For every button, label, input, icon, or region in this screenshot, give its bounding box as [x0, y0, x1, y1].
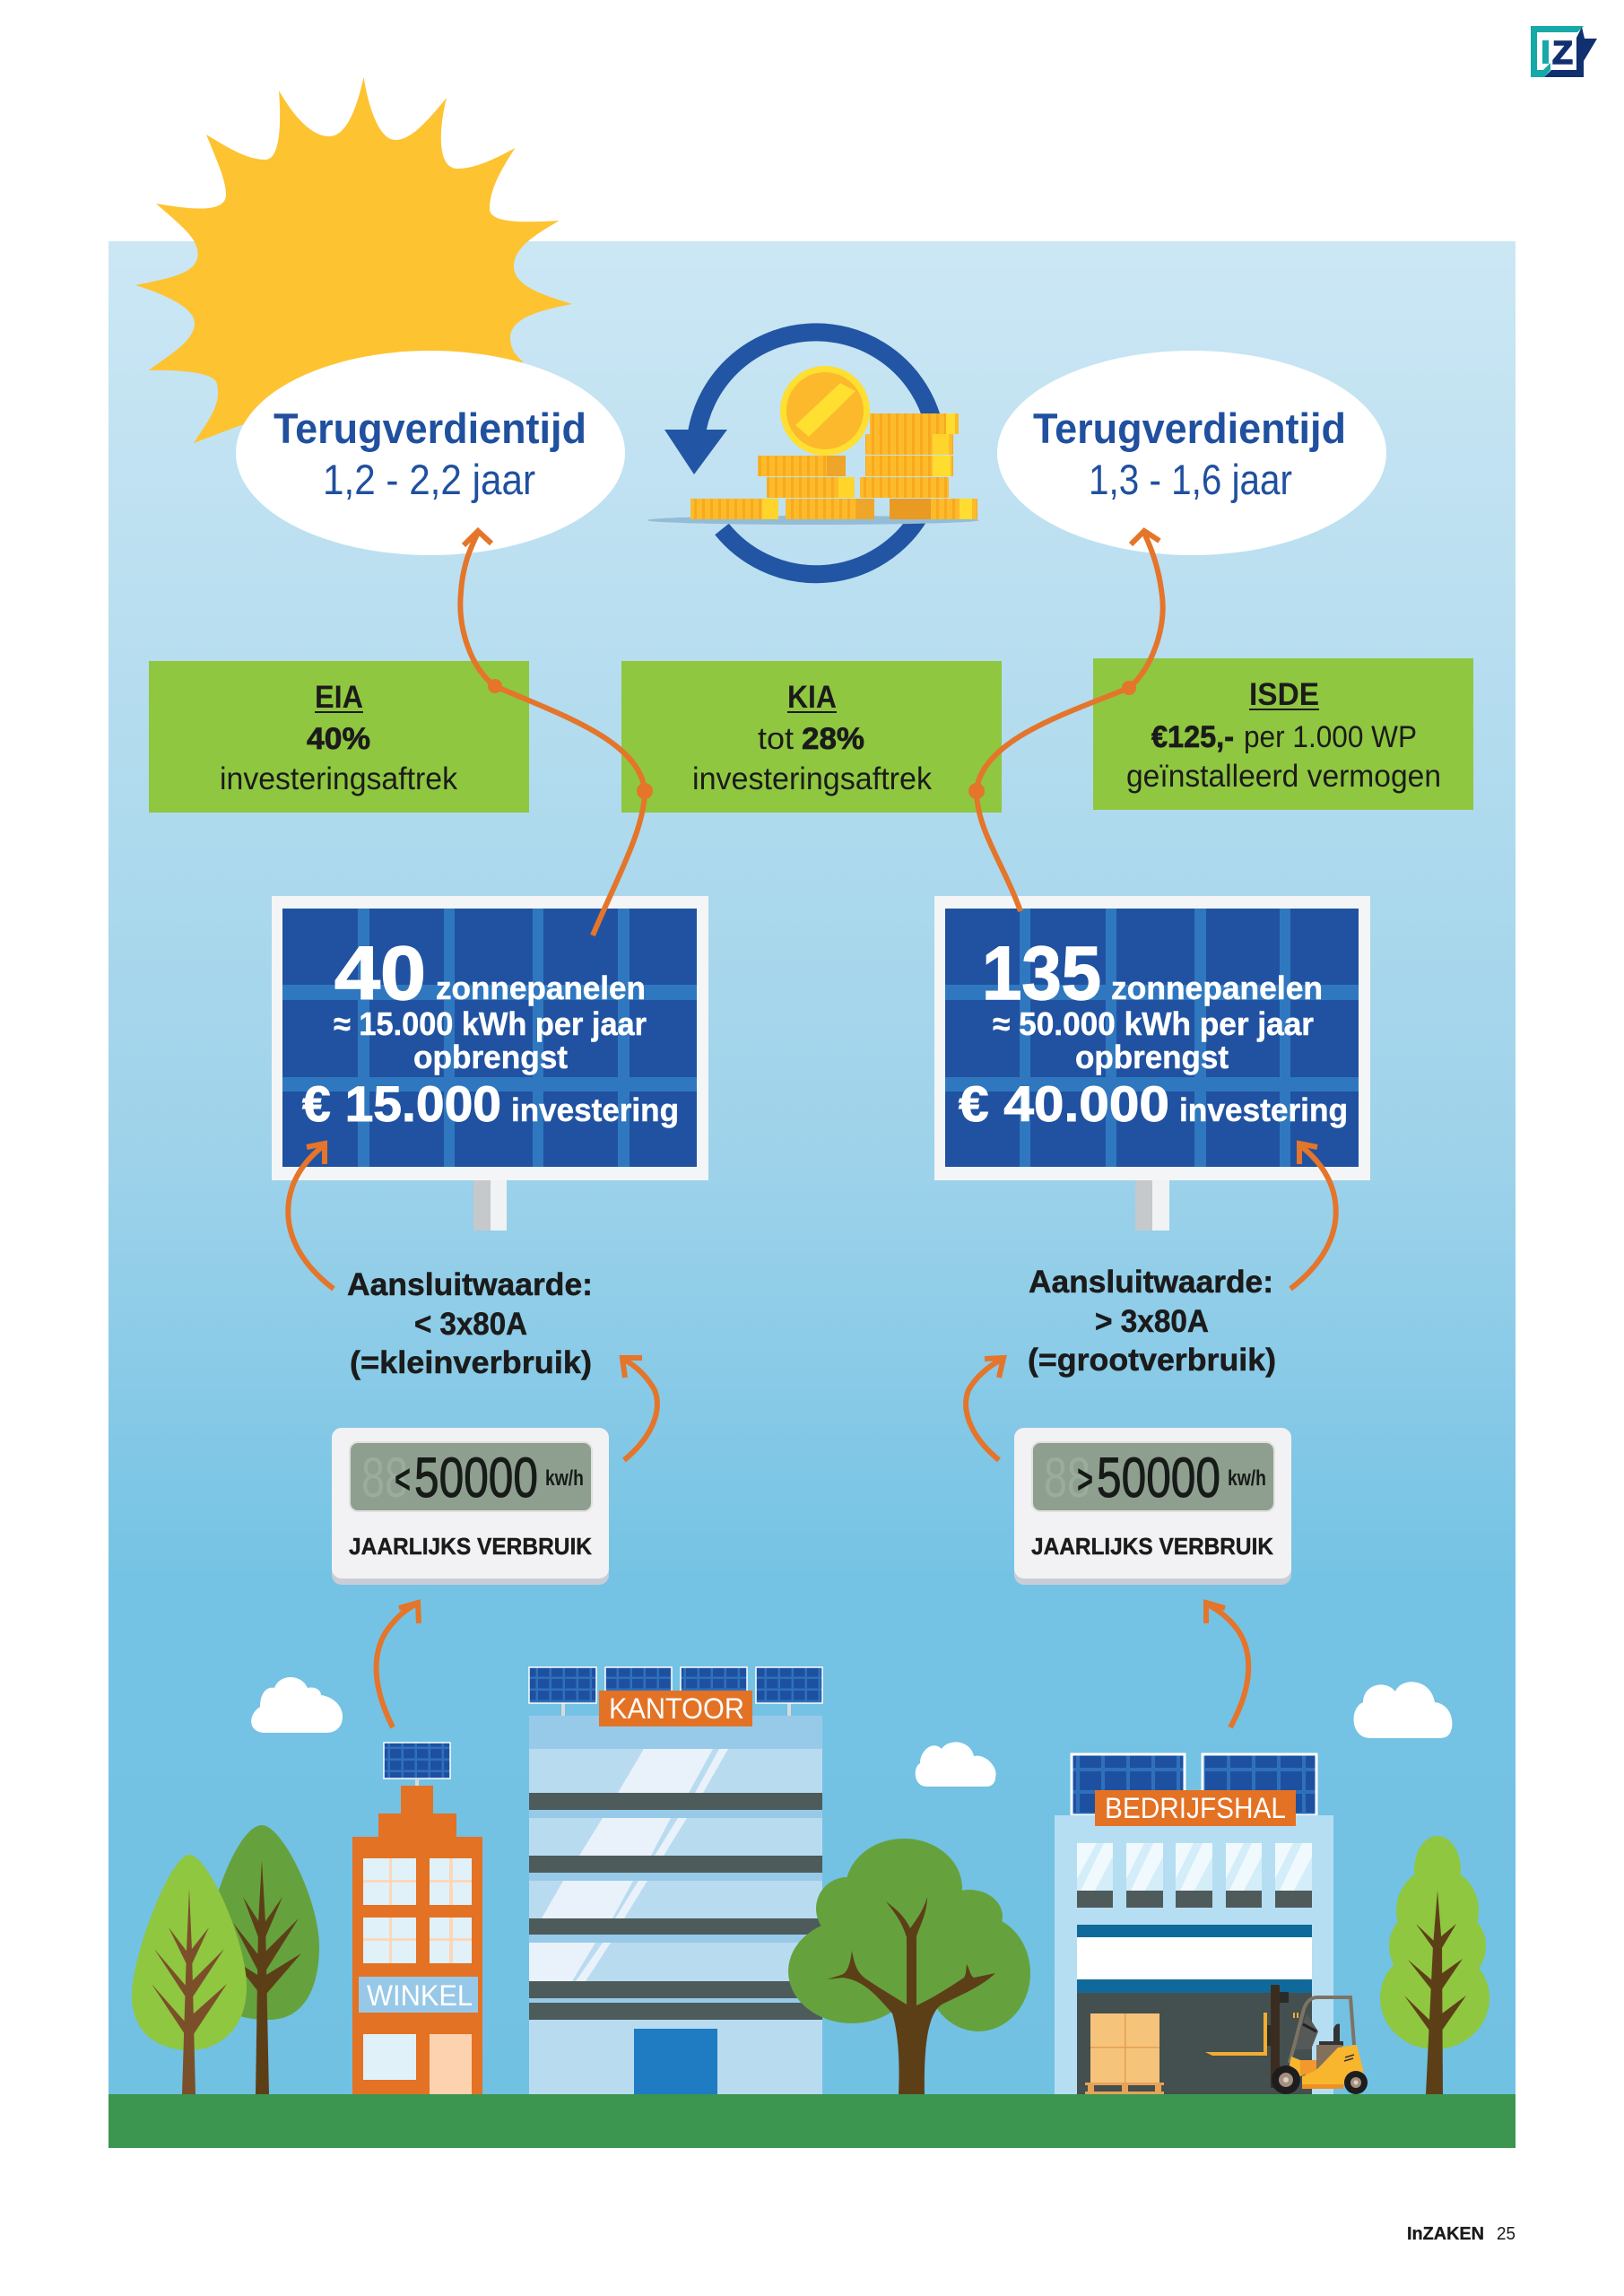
text: aansluitwaarde links: < 3x80A	[414, 1307, 527, 1342]
text: aansluitwaarde rechts: Aansluitwaarde:	[1029, 1265, 1273, 1300]
building: winkel: WINKEL	[367, 1979, 473, 2012]
solar panel rechts: investering	[1179, 1091, 1348, 1128]
meter links: <	[395, 1456, 411, 1502]
arrow: bedrijfshal naar meter	[1206, 1603, 1248, 1727]
solar panel rechts: zonnepanelen	[1111, 970, 1323, 1006]
icon: cloud links	[251, 1677, 343, 1733]
building: kantoor	[529, 1667, 822, 2094]
panel: EIA: 40%	[307, 722, 370, 756]
panel: EIA: investeringsaftrek	[220, 761, 457, 796]
pallet with boxes	[1085, 2013, 1164, 2094]
meter rechts: kw/h	[1228, 1466, 1266, 1491]
panel: ISDE: geïnstalleerd vermogen	[1126, 759, 1441, 794]
solar panel rechts: € 40.000	[959, 1075, 1169, 1132]
text: aansluitwaarde rechts: > 3x80A	[1095, 1304, 1209, 1339]
arrow: aansluitwaarde rechts naar paneel	[1290, 1144, 1336, 1289]
tree: rond	[788, 1839, 1030, 2094]
building: winkel	[352, 1743, 482, 2094]
panel: KIA: 28%	[802, 722, 864, 756]
meter links: 88	[361, 1447, 408, 1509]
icon: coins with cycle arrow	[647, 332, 979, 574]
arrow: rechts zonnepaneel naar terugverdientijd	[968, 531, 1163, 911]
text: aansluitwaarde links: Aansluitwaarde:	[347, 1267, 593, 1302]
solar panel rechts: 135	[982, 931, 1101, 1015]
meter rechts: >	[1077, 1456, 1093, 1502]
tree: rechts	[1380, 1836, 1489, 2094]
callout: terugverdientijd links	[236, 351, 625, 555]
building: bedrijfshal: BEDRIJFSHAL	[1105, 1792, 1286, 1824]
meter links: 50000	[414, 1447, 538, 1509]
arrow: aansluitwaarde links naar paneel	[288, 1144, 334, 1289]
text: aansluitwaarde links: (=kleinverbruik)	[350, 1345, 592, 1380]
callout: terugverdientijd rechts: Terugverdientijd	[1033, 404, 1346, 452]
solar panel links	[272, 896, 708, 1231]
solar panel links: 40	[334, 931, 426, 1015]
solar panel links: ≈ 15.000 kWh per jaar	[334, 1005, 647, 1042]
meter rechts: JAARLIJKS VERBRUIK	[1031, 1533, 1273, 1560]
callout: terugverdientijd rechts: 1,3 - 1,6 jaar	[1089, 456, 1292, 503]
panel: ISDE: €125,-	[1151, 720, 1234, 754]
icon: cloud rechts	[1354, 1682, 1452, 1738]
arrow: winkel naar meter	[377, 1603, 419, 1727]
footer: magazine name and page number: InZAKEN	[1407, 2224, 1484, 2244]
solar panel links: € 15.000	[302, 1075, 501, 1132]
meter links	[332, 1428, 609, 1585]
building: kantoor: KANTOOR	[609, 1692, 744, 1725]
meter rechts: 50000	[1097, 1447, 1220, 1509]
solar panel links: investering	[511, 1091, 679, 1128]
callout: terugverdientijd links: 1,2 - 2,2 jaar	[323, 456, 535, 503]
solar panel rechts: opbrengst	[1075, 1039, 1229, 1075]
callout: terugverdientijd links: Terugverdientijd	[274, 404, 586, 452]
callout: terugverdientijd rechts	[997, 351, 1386, 555]
building: bedrijfshal	[1055, 1754, 1368, 2094]
panel: ISDE: ISDE	[1249, 677, 1319, 712]
meter rechts: 88	[1044, 1447, 1090, 1509]
logo: InZaken	[1531, 26, 1597, 77]
text: aansluitwaarde links	[347, 1267, 593, 1380]
arrow: meter rechts naar aansluitwaarde	[966, 1358, 1003, 1460]
meter links: JAARLIJKS VERBRUIK	[349, 1533, 592, 1560]
solar panel links: opbrengst	[413, 1039, 568, 1075]
arrow: links zonnepaneel naar terugverdientijd	[460, 531, 653, 935]
footer: magazine name and page number: 25	[1497, 2224, 1515, 2244]
arrow: meter links naar aansluitwaarde	[622, 1358, 657, 1460]
meter rechts	[1014, 1428, 1291, 1585]
meter links: kw/h	[545, 1466, 584, 1491]
tree: licht links en donker	[132, 1825, 319, 2094]
solar panel rechts: ≈ 50.000 kWh per jaar	[993, 1005, 1314, 1042]
panel: EIA: EIA	[315, 680, 363, 715]
icon: cloud midden	[916, 1742, 996, 1787]
logo: InZaken: Z	[1552, 34, 1573, 71]
solar panel links: zonnepanelen	[436, 970, 646, 1006]
panel: KIA	[621, 661, 1002, 813]
panel: ISDE	[1093, 658, 1473, 810]
sky panel	[109, 241, 1515, 2095]
panel: KIA: KIA	[787, 680, 837, 715]
panel: EIA	[149, 661, 529, 813]
text: aansluitwaarde rechts	[1028, 1265, 1276, 1378]
panel: ISDE: per 1.000 WP	[1244, 720, 1417, 754]
solar panel rechts	[934, 896, 1370, 1231]
icon: sun	[135, 77, 572, 502]
ground	[109, 2094, 1515, 2148]
panel: KIA: investeringsaftrek	[692, 761, 932, 796]
text: aansluitwaarde rechts: (=grootverbruik)	[1028, 1343, 1276, 1378]
icon: forklift	[1205, 1985, 1368, 2094]
panel: KIA: tot	[758, 722, 795, 756]
